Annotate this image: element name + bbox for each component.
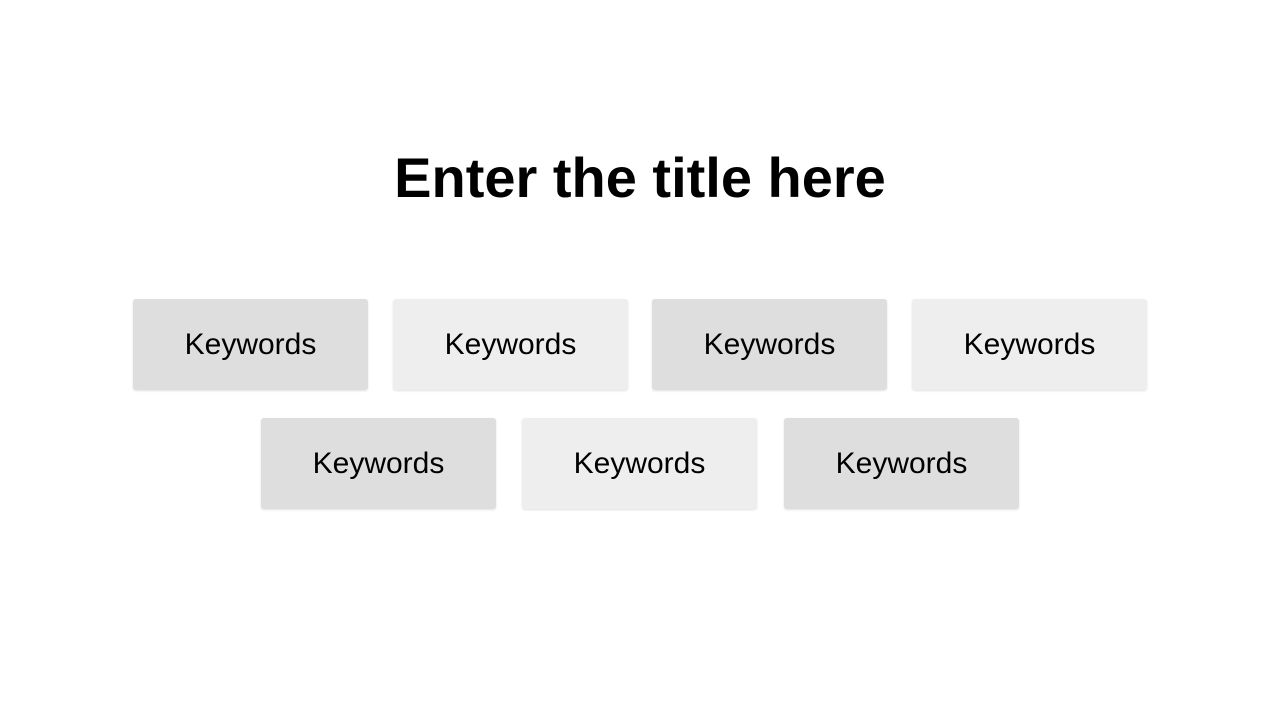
keyword box 3: Keywords — [704, 328, 835, 360]
keyword box 4 — [912, 299, 1147, 390]
title: Enter the title here — [394, 146, 886, 209]
keyword box 2: Keywords — [445, 328, 576, 360]
keyword box 3 — [652, 299, 887, 390]
keyword box 6: Keywords — [574, 446, 705, 480]
keyword box 1: Keywords — [185, 328, 316, 360]
keyword box 6 — [522, 418, 757, 509]
keyword box 5 — [261, 418, 496, 509]
keyword box 5: Keywords — [313, 446, 444, 480]
keyword box 7: Keywords — [836, 446, 967, 480]
keyword box 7 — [784, 418, 1019, 509]
keyword box 1 — [133, 299, 368, 390]
keyword box 4: Keywords — [964, 328, 1095, 360]
keyword box 2 — [393, 299, 628, 390]
